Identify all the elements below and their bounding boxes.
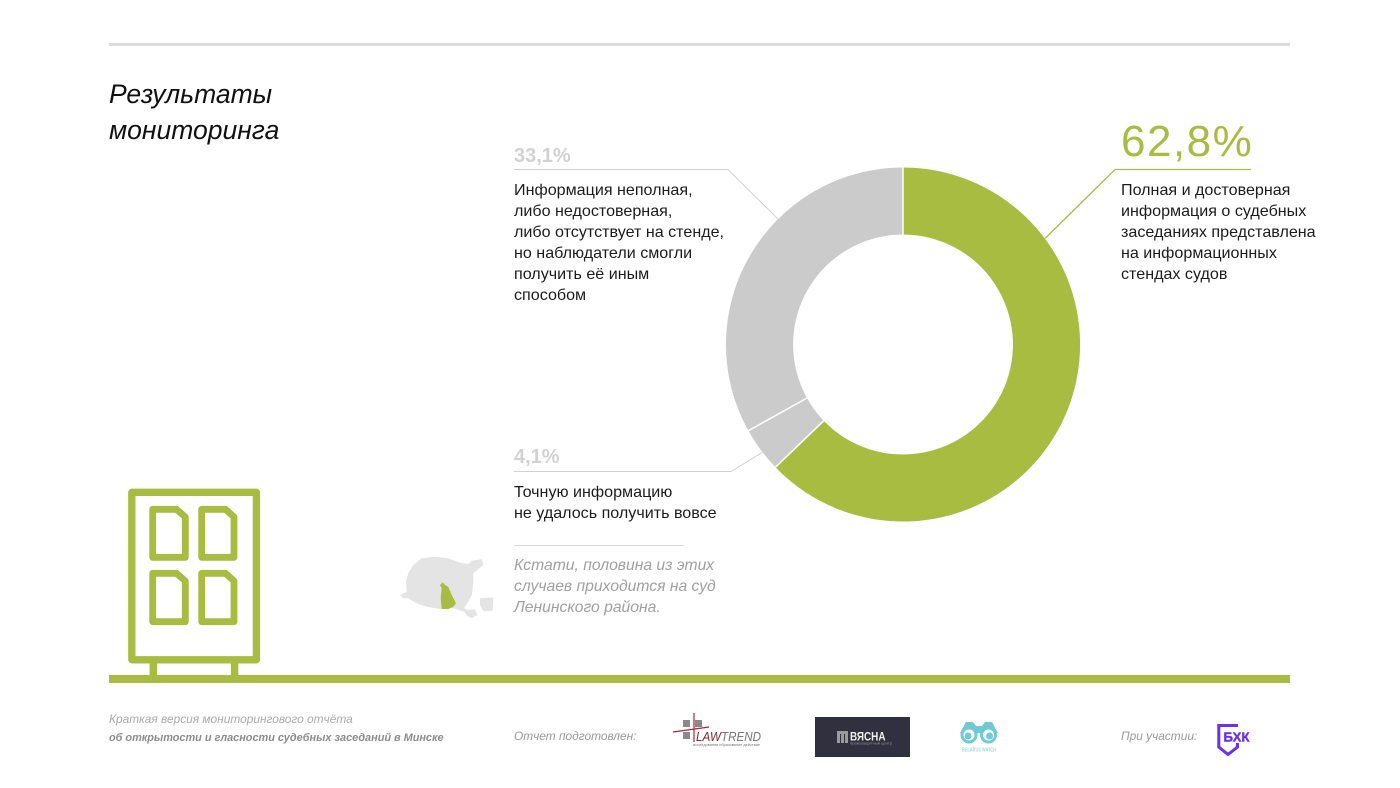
- text: no information: [514, 483, 717, 522]
- logo: Lawtrend: исследования образование действие: [693, 742, 761, 747]
- note: Ленинского района.: [514, 599, 661, 616]
- segment: 4.1%: [748, 398, 824, 467]
- footer label: prepared by: Отчет подготовлен:: [514, 729, 636, 743]
- segment: 33.1%: [726, 167, 903, 431]
- text: no information: Точную информацию: [514, 483, 672, 501]
- segment: 62.8%: [776, 167, 1080, 522]
- text: incomplete information: [514, 181, 724, 304]
- note: [513, 557, 716, 616]
- footer description: Краткая версия мониторингового отчёта: [109, 712, 353, 726]
- footer description: [109, 712, 444, 744]
- logo: Viasna: ВЯСНА: [850, 730, 886, 744]
- text: full information: стендах судов: [1121, 265, 1227, 283]
- text: full information: информация о судебных: [1121, 202, 1306, 220]
- logo: Belarus Watch: BELARUS WATCH: [962, 748, 996, 754]
- logo: BHC: БХК: [1224, 730, 1250, 744]
- text: full information: заседаниях представлена: [1121, 223, 1316, 241]
- text: incomplete information: способом: [514, 286, 586, 304]
- title: Результаты: [109, 79, 272, 109]
- text: full information: Полная и достоверная: [1121, 181, 1290, 199]
- text: incomplete information: получить её иным: [514, 265, 649, 283]
- note: случаев приходится на суд: [514, 578, 716, 595]
- title: [109, 79, 279, 145]
- title: мониторинга: [109, 115, 279, 145]
- footer label: with participation: При участии:: [1121, 729, 1197, 743]
- text: incomplete information: но наблюдатели смогли: [514, 244, 692, 262]
- value: 62.8%: 62,8%: [1121, 117, 1253, 166]
- value: 33.1%: 33,1%: [514, 145, 571, 167]
- text: incomplete information: либо отсутствует на стенде,: [514, 223, 724, 241]
- value: 4.1%: 4,1%: [514, 446, 560, 468]
- text: incomplete information: Информация неполная,: [514, 181, 693, 199]
- text: full information: [1121, 181, 1316, 283]
- logo: Viasna: правозащитный центр: [850, 742, 892, 746]
- text: no information: не удалось получить вовсе: [514, 504, 717, 522]
- note: Кстати, половина из этих: [514, 557, 714, 574]
- footer description: об открытости и гласности судебных заседаний в Минске: [109, 732, 444, 744]
- text: full information: на информационных: [1121, 244, 1277, 262]
- text: incomplete information: либо недостоверная,: [514, 202, 672, 220]
- top rule: [109, 43, 1290, 46]
- logo: Lawtrend: LAWTREND: [696, 729, 761, 744]
- baseline: [109, 675, 1290, 683]
